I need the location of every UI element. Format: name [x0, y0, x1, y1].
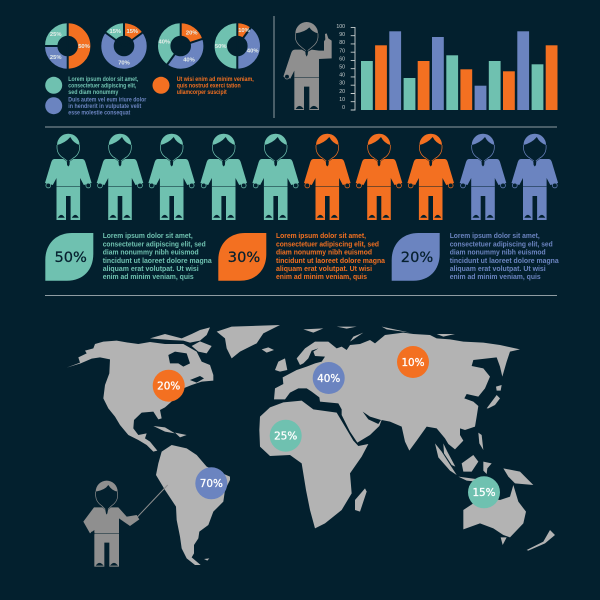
world map — [67, 325, 555, 565]
text block: teal — [103, 231, 213, 281]
text block: orange: consectetuer adipiscing elit, sed — [276, 240, 379, 248]
legend: orange: quis nostrud exerci tation — [177, 84, 241, 90]
legend: teal: consectetuer adipiscing elit, — [68, 84, 137, 90]
map marker: 70%: 70% — [200, 478, 223, 490]
map marker: 25% — [270, 420, 302, 452]
map marker: 15% — [468, 476, 500, 508]
donut chart: 10 40 50: 50% — [215, 44, 227, 50]
text block: teal: aliquam erat volutpat. Ut wisi — [103, 264, 199, 273]
map marker: 25%: 25% — [274, 430, 297, 442]
bar chart axis: 30 — [339, 81, 345, 87]
donut chart: 15 70 15: 15% — [109, 29, 121, 35]
text block: teal: tincidunt ut laoreet dolore magna — [103, 256, 213, 265]
text block: orange: enim ad minim veniam, quis — [276, 272, 367, 281]
donut chart: 15 70 15: 70% — [118, 61, 130, 67]
bar chart bars — [361, 31, 558, 110]
callout: 20% blue: 20% — [401, 249, 433, 266]
legend: teal: Lorem ipsum dolor sit amet, — [68, 77, 139, 83]
bar chart axis — [336, 24, 355, 111]
text block: orange: tincidunt ut laoreet dolore magna — [276, 256, 386, 265]
text block: blue: enim ad minim veniam, quis — [450, 272, 541, 281]
bar chart axis: 80 — [339, 40, 345, 46]
donut chart: 20 40 40: 40% — [183, 57, 195, 63]
legend: teal — [45, 77, 139, 96]
map marker: 20% — [153, 370, 185, 402]
legend: blue: Duis autem vel eum iriure dolor — [68, 97, 147, 103]
donut chart: 20 40 40: 40% — [158, 40, 170, 46]
callout: 50% teal — [45, 233, 93, 281]
map marker: 70% — [195, 467, 227, 499]
text block: orange: diam nonummy nibh euismod — [276, 248, 372, 257]
donut chart: 50 25 25: 50% — [78, 44, 90, 50]
donut chart: 20 40 40 — [158, 22, 204, 65]
donut chart: 20 40 40: 20% — [186, 31, 198, 37]
bar chart axis: 70 — [339, 48, 345, 54]
bar chart axis: 100 — [336, 24, 345, 30]
callout: 20% blue — [392, 233, 440, 281]
text block: blue: tincidunt ut laoreet dolore magna — [450, 256, 560, 265]
legend: blue: in hendrerit in vulputate velit — [68, 104, 141, 110]
map marker: 40% — [313, 362, 345, 394]
map: Americas and Greenland — [67, 325, 280, 565]
legend: orange — [152, 77, 254, 96]
bar chart axis: 90 — [339, 32, 345, 38]
text block: blue: aliquam erat volutpat. Ut wisi — [450, 264, 546, 273]
donut chart: 10 40 50: 10% — [238, 28, 250, 34]
row of people icons — [45, 134, 558, 220]
donut chart: 50 25 25 — [44, 22, 90, 70]
bar chart axis: 50 — [339, 64, 345, 70]
bar chart axis: 10 — [339, 97, 345, 103]
donut chart: 15 70 15 — [105, 22, 143, 67]
text block: blue — [450, 231, 560, 281]
map marker: 40%: 40% — [317, 373, 340, 385]
callout: 30% orange: 30% — [228, 249, 260, 266]
map marker: 10%: 10% — [401, 357, 425, 369]
legend: blue: esse molestie consequat — [68, 110, 130, 116]
legend: orange: ullamcorper suscipit — [177, 90, 227, 96]
text block: orange: Lorem ipsum dolor sit amet, — [276, 231, 366, 240]
text block: blue: diam nonummy nibh euismod — [450, 248, 546, 257]
text block: teal: Lorem ipsum dolor sit amet, — [103, 231, 193, 240]
donut chart: 15 70 15: 15% — [126, 29, 138, 35]
icon: presenter with pointer — [83, 481, 168, 567]
bar chart axis: 0 — [342, 105, 345, 111]
map marker: 10% — [397, 346, 429, 378]
legend: orange: Ut wisi enim ad minim veniam, — [177, 77, 254, 83]
donut chart: 10 40 50: 40% — [247, 49, 259, 55]
bar chart axis: 40 — [339, 73, 345, 79]
text block: orange — [276, 231, 386, 281]
bar chart axis: 60 — [339, 56, 345, 62]
donut chart: 50 25 25: 25% — [50, 32, 62, 38]
map: Eurasia, Africa, Australia — [259, 327, 555, 551]
text block: teal: diam nonummy nibh euismod — [103, 248, 199, 257]
map marker: 15%: 15% — [472, 487, 496, 499]
legend: teal: sed diam nonummy — [68, 90, 119, 96]
text block: blue: consectetuer adipiscing elit, sed — [450, 240, 553, 248]
map marker: 20%: 20% — [157, 380, 180, 392]
text block: teal: consectetuer adipiscing elit, sed — [103, 240, 206, 248]
callout: 30% orange — [218, 233, 266, 281]
bar chart axis: 20 — [339, 89, 345, 95]
text block: blue: Lorem ipsum dolor sit amet, — [450, 231, 540, 240]
legend: blue — [45, 97, 147, 116]
callout: 50% teal: 50% — [54, 249, 87, 266]
icon: person pointing up — [283, 22, 332, 110]
text block: teal: enim ad minim veniam, quis — [103, 272, 194, 281]
donut chart: 10 40 50 — [215, 22, 259, 70]
donut chart: 50 25 25: 25% — [50, 55, 62, 61]
text block: orange: aliquam erat volutpat. Ut wisi — [276, 264, 372, 273]
